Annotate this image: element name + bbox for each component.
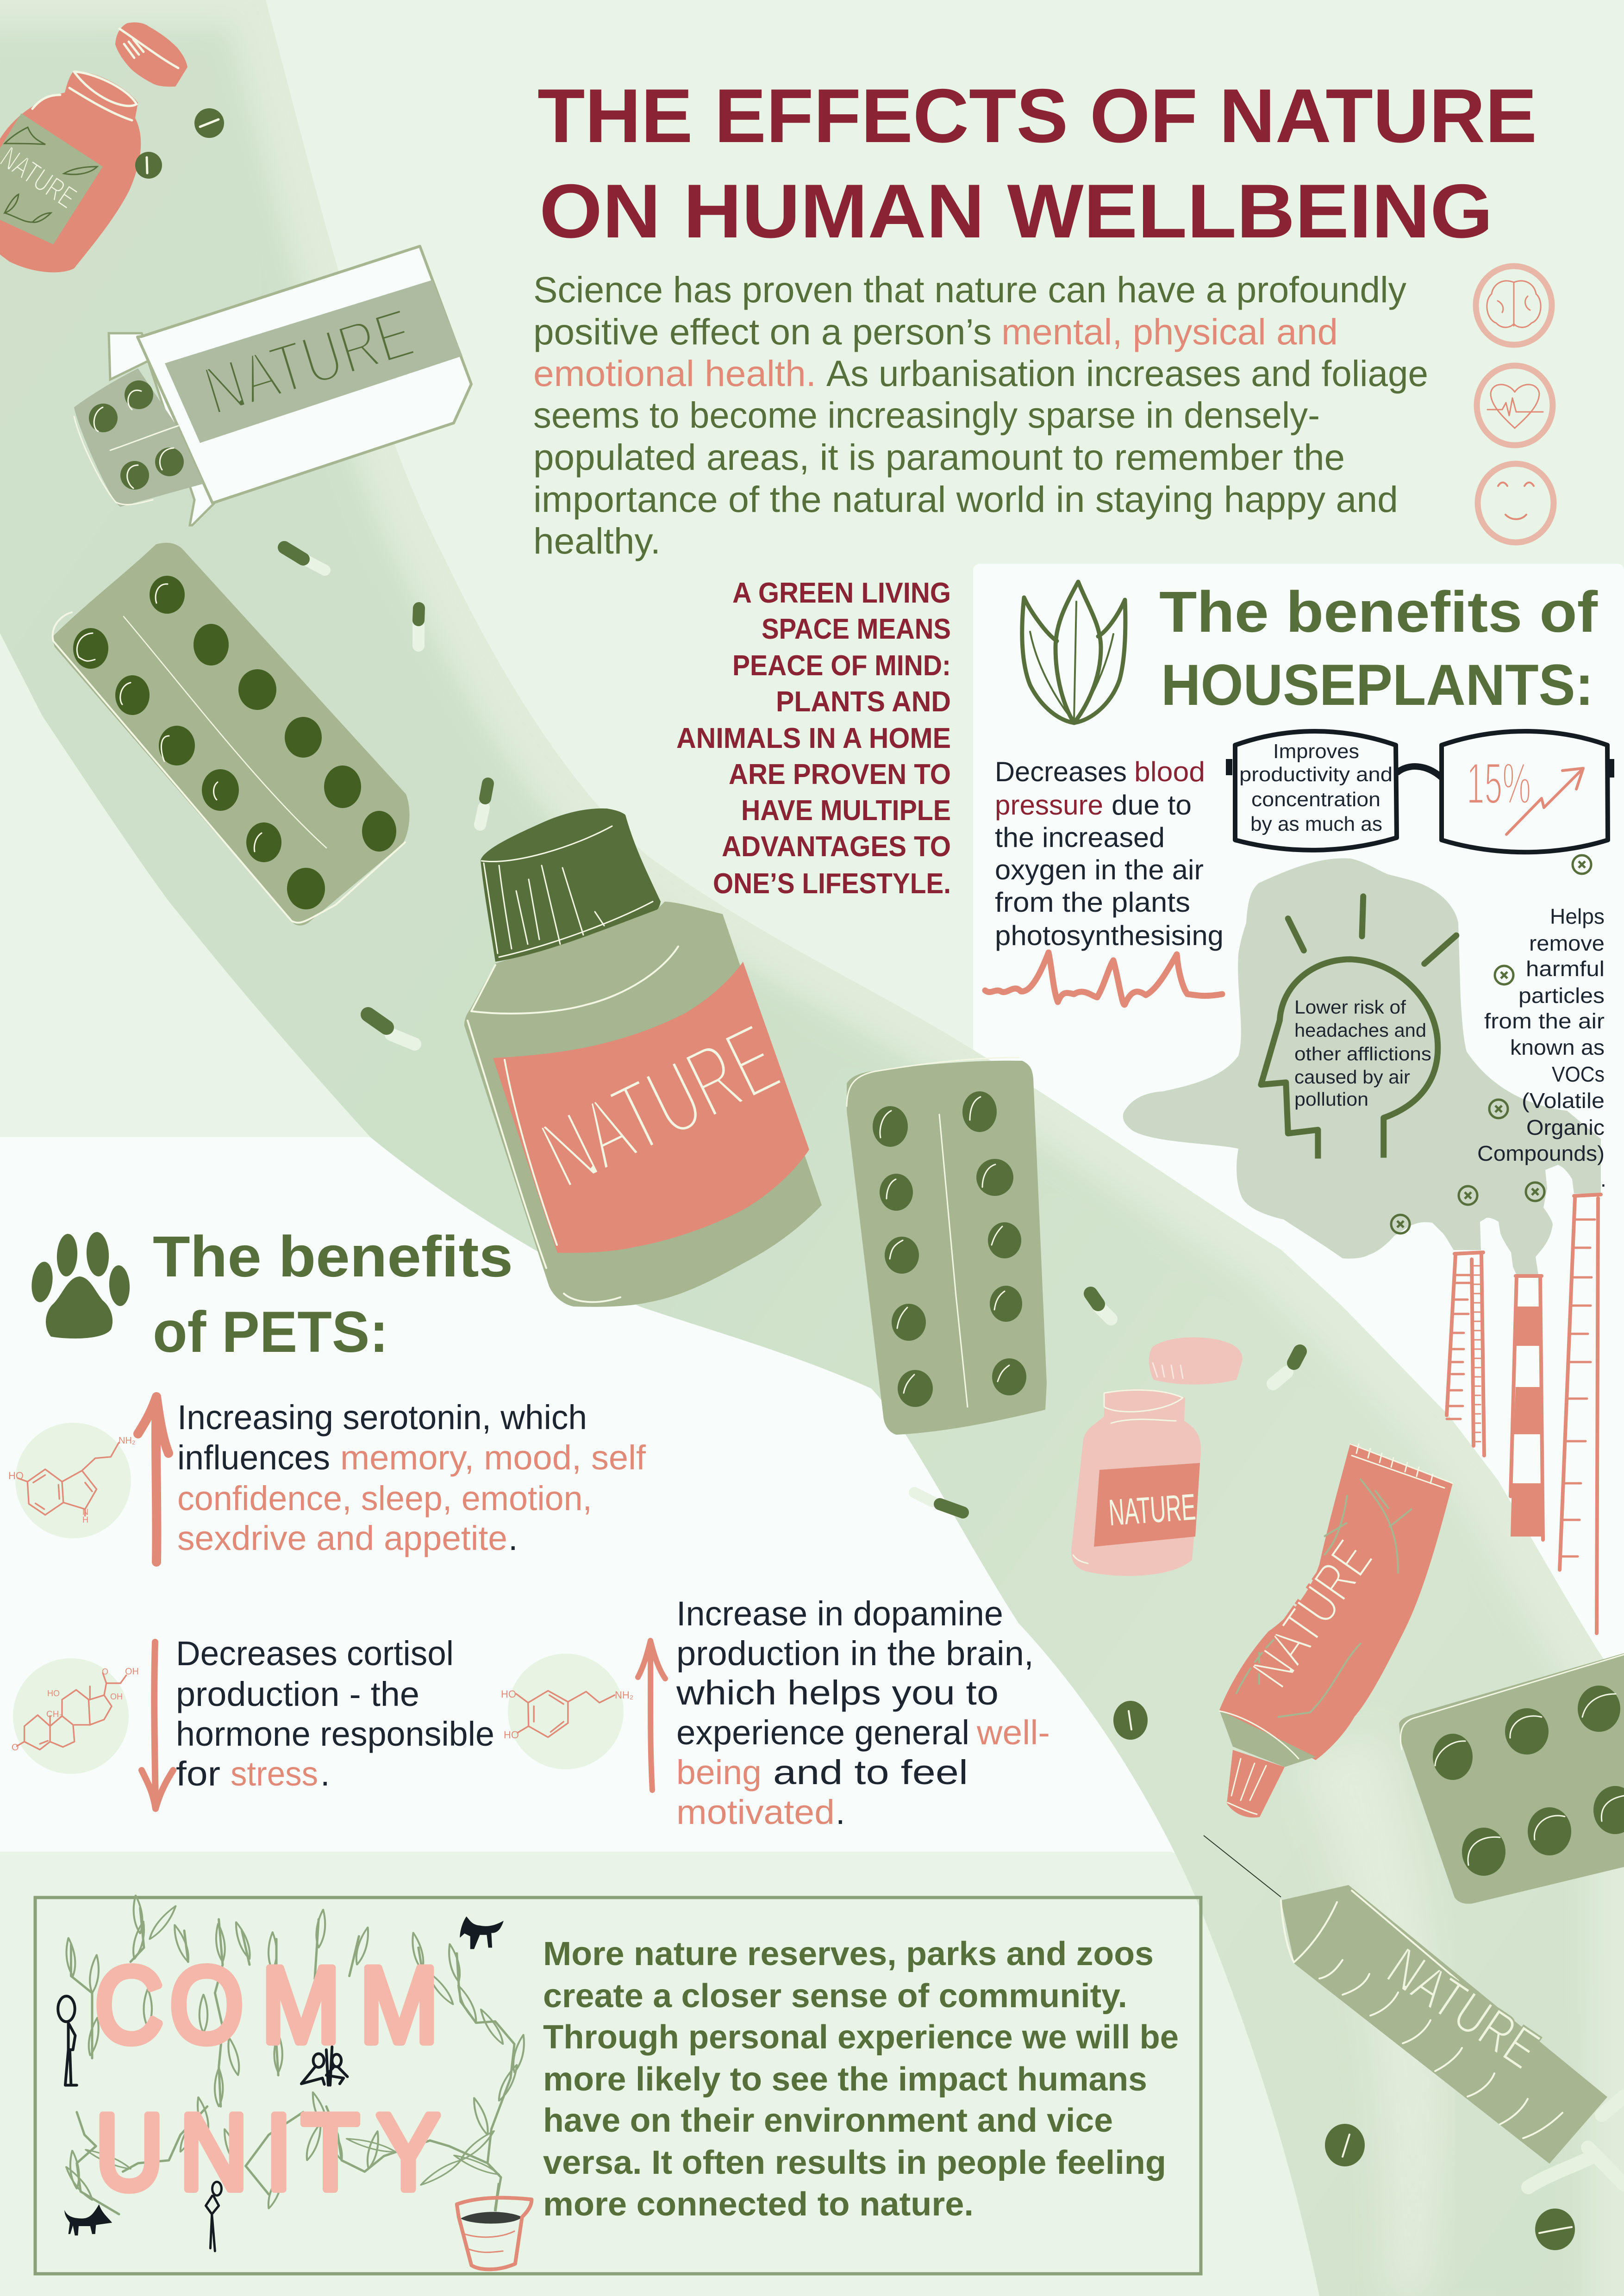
text block: dopamine: production in the brain, <box>676 1634 1034 1673</box>
text block: green living space: A GREEN LIVING <box>732 577 951 609</box>
text: UNITY: UNITY <box>95 2092 440 2212</box>
text block: cortisol: . <box>320 1755 330 1793</box>
icon: dopamine molecule: HO <box>504 1729 519 1741</box>
text: COMM: COMM <box>95 1945 438 2065</box>
text block: lower risk of headaches: Lower risk of <box>1294 996 1406 1018</box>
text block: serotonin <box>177 1398 646 1557</box>
statistic: 15%: 15% <box>1467 752 1531 816</box>
text block: community: Through personal experience we will be <box>543 2019 1179 2056</box>
icon: capsules <box>284 548 1300 1512</box>
chimney: left, ladder <box>1447 1252 1484 1456</box>
text block: introduction: healthy. <box>533 520 661 561</box>
stick figures: seated couple <box>301 2047 347 2085</box>
text block: green living space: PLANTS AND <box>776 686 951 718</box>
text block: green living space: SPACE MEANS <box>762 613 951 645</box>
text block: helps remove VOCs: from the air <box>1484 1009 1605 1033</box>
text block: blood pressure: oxygen in the air <box>995 854 1204 885</box>
text block: introduction: mental, physical and <box>1001 311 1338 352</box>
text block: community: more likely to see the impact humans <box>543 2061 1147 2098</box>
icon: brain in circle <box>1476 266 1552 345</box>
text block: lower risk of headaches: other afflictions <box>1294 1043 1431 1064</box>
chimney: right, ladder <box>1560 1195 1601 1633</box>
icon: syringe <box>1204 1836 1624 2187</box>
dog: bottom left <box>64 2204 112 2235</box>
text block: green living space: ARE PROVEN TO <box>729 759 951 790</box>
icon: upward arrow <box>1506 768 1583 834</box>
icon: red pill bottle, top left <box>0 22 187 272</box>
glasses text <box>1239 740 1393 835</box>
icon: heart in circle <box>1477 366 1553 445</box>
text block: introduction: populated areas, it is paramount to remember the <box>533 436 1345 478</box>
text block: serotonin: sexdrive and appetite <box>177 1519 507 1557</box>
text block: serotonin: Increasing serotonin, which <box>177 1398 587 1437</box>
arrow: cortisol down <box>142 1642 173 1809</box>
text block: blood pressure: blood <box>1134 756 1205 787</box>
text block: helps remove VOCs: Compounds) <box>1477 1141 1605 1165</box>
text block: helps remove VOCs: harmful <box>1526 957 1605 981</box>
panel: community frame <box>35 1898 1201 2274</box>
stick figure: standing bottom <box>206 2182 221 2251</box>
icon: cortisol molecule <box>12 1658 139 1774</box>
text block: dopamine <box>676 1594 1050 1831</box>
title: ON HUMAN WELLBEING <box>539 168 1493 254</box>
title: THE EFFECTS OF NATURE <box>537 73 1537 158</box>
icon: cortisol molecule: OH <box>110 1692 123 1701</box>
heading: benefits of houseplants: The benefits of <box>1159 580 1598 644</box>
heading: benefits of houseplants: HOUSEPLANTS: <box>1161 653 1593 717</box>
blister sliding out of box <box>74 368 204 507</box>
heading: benefits of pets: of PETS: <box>153 1300 388 1364</box>
chimneys <box>1447 1195 1601 1633</box>
icon: nature pill box <box>74 246 471 525</box>
text block: introduction <box>533 269 1428 561</box>
text block: helps remove VOCs: known as <box>1510 1035 1605 1059</box>
text block: green living space: PEACE OF MIND: <box>732 650 951 682</box>
text block: serotonin: memory, mood, self <box>340 1438 646 1477</box>
icon: large green blister pack <box>52 543 410 926</box>
label: NATURE on syringe: NATURE <box>1376 1935 1550 2081</box>
text block: green living space <box>676 577 951 900</box>
text block: blood pressure: Decreases <box>995 756 1127 787</box>
icon: small round pills, top <box>135 108 224 179</box>
icon: smile in circle <box>1478 464 1554 542</box>
text block: serotonin: confidence, sleep, emotion, <box>177 1479 592 1518</box>
text block: serotonin: . <box>508 1519 518 1557</box>
glasses text: Improves <box>1273 740 1359 763</box>
text block: community: More nature reserves, parks and zoos <box>543 1935 1154 1972</box>
heading: benefits of houseplants <box>1159 580 1598 717</box>
text block: introduction: importance of the natural world in staying happy and <box>533 479 1398 520</box>
icon: leaf <box>1022 582 1125 723</box>
panel: houseplants background <box>973 564 1624 1721</box>
icon: dopamine molecule: NH₂ <box>615 1689 633 1701</box>
icon: serotonin molecule: NH₂ <box>119 1436 136 1446</box>
icon: VOC particles <box>1391 855 1591 1233</box>
text block: blood pressure: from the plants <box>995 887 1190 918</box>
icon: paw print <box>29 1232 131 1338</box>
text block: green living space: ADVANTAGES TO <box>722 831 951 863</box>
text block: cortisol: Decreases cortisol <box>176 1634 454 1673</box>
arrow: dopamine up <box>638 1641 665 1790</box>
label: NATURE on large bottle: NATURE <box>525 1002 795 1209</box>
text block: green living space: HAVE MULTIPLE <box>741 795 951 827</box>
icon: serotonin molecule: HO <box>8 1470 24 1481</box>
dog: top right <box>460 1916 504 1949</box>
glasses text: productivity and <box>1239 763 1393 786</box>
text block: dopamine: . <box>836 1793 845 1831</box>
text block: dopamine: well- <box>976 1713 1050 1752</box>
icon: pink jar <box>1071 1338 1243 1576</box>
text block: lower risk of headaches <box>1294 996 1431 1110</box>
text block: dopamine: being <box>676 1753 762 1792</box>
text block: dopamine: Increase in dopamine <box>676 1594 1003 1633</box>
text block: helps remove VOCs: . <box>1600 1167 1606 1191</box>
text block: community: create a closer sense of community. <box>543 1978 1127 2015</box>
icon: cortisol molecule: OH <box>125 1667 139 1677</box>
arrow: serotonin up <box>138 1397 169 1562</box>
text block: cortisol <box>176 1634 494 1793</box>
label: NATURE on box: NATURE <box>195 293 422 430</box>
icon: serotonin molecule: N <box>82 1507 88 1517</box>
text block: community <box>543 1935 1179 2223</box>
label: NATURE on tube: NATURE <box>1240 1529 1385 1699</box>
icon: cortisol molecule: O <box>12 1742 19 1753</box>
icon: blister pack, right <box>1399 1653 1624 1904</box>
text block: cortisol: for <box>176 1755 220 1793</box>
text block: blood pressure <box>995 756 1224 951</box>
text block: introduction: As urbanisation increases and foliage <box>826 353 1428 394</box>
icon: cortisol molecule: CH₃ <box>46 1710 62 1719</box>
text block: introduction: Science has proven that nature can have a profoundly <box>533 269 1406 310</box>
icon: round pills, lower <box>1113 1701 1575 2250</box>
heading: benefits of pets: The benefits <box>153 1225 513 1289</box>
text block: helps remove VOCs <box>1477 904 1606 1191</box>
text block: dopamine: and to feel <box>773 1753 968 1792</box>
glasses text: concentration <box>1251 788 1380 811</box>
smoke cloud <box>1123 858 1601 1275</box>
text block: green living space: ONE’S LIFESTYLE. <box>713 868 951 900</box>
text block: dopamine: motivated <box>676 1793 835 1831</box>
text block: community: more connected to nature. <box>543 2186 974 2223</box>
text block: helps remove VOCs: (Volatile <box>1522 1089 1605 1113</box>
panel: pets background <box>0 1137 1250 1853</box>
text block: cortisol: stress <box>231 1755 318 1793</box>
text block: lower risk of headaches: caused by air <box>1294 1066 1410 1088</box>
text block: helps remove VOCs: remove <box>1529 931 1605 955</box>
icon: toothpaste tube <box>1219 1443 1453 1817</box>
text block: blood pressure: due to <box>1112 790 1192 821</box>
text block: blood pressure: the increased <box>995 822 1165 853</box>
icon: blister pack, centre <box>847 1058 1047 1435</box>
text block: introduction: seems to become increasingly sparse in densely- <box>533 394 1320 436</box>
text block: helps remove VOCs: Organic <box>1526 1115 1605 1139</box>
icon: head outline with rays <box>1261 896 1456 1158</box>
panel: community background <box>0 1852 1319 2296</box>
text block: helps remove VOCs: VOCs <box>1552 1062 1605 1086</box>
text block: lower risk of headaches: pollution <box>1294 1089 1368 1110</box>
icon: serotonin molecule: H <box>82 1515 88 1524</box>
text block: serotonin: influences <box>177 1438 330 1477</box>
text block: introduction: positive effect on a person’s <box>533 311 992 352</box>
icon: cortisol molecule: O <box>102 1667 108 1676</box>
text block: lower risk of headaches: headaches and <box>1294 1020 1426 1041</box>
text block: introduction: emotional health. <box>533 353 816 394</box>
icon: serotonin molecule <box>8 1423 136 1538</box>
text block: dopamine: experience general <box>676 1713 969 1752</box>
text block: blood pressure: photosynthesising <box>995 920 1224 951</box>
illustration: plant pot <box>457 2183 531 2269</box>
stick figure: standing left <box>58 1996 77 2085</box>
icon: cortisol molecule: HO <box>47 1689 60 1698</box>
text block: helps remove VOCs: Helps <box>1550 904 1605 928</box>
glasses text: by as much as <box>1250 813 1382 835</box>
label: NATURE on jar: NATURE <box>1107 1486 1197 1533</box>
text block: cortisol: hormone responsible <box>176 1715 494 1753</box>
icon: dopamine molecule: HO <box>501 1688 516 1700</box>
heading: benefits of pets <box>153 1225 513 1364</box>
icon: dopamine molecule <box>501 1654 633 1769</box>
text block: blood pressure: pressure <box>995 790 1103 821</box>
text block: community: versa. It often results in people feeling <box>543 2144 1166 2181</box>
icon: pulse line <box>985 952 1222 1005</box>
title <box>537 73 1537 254</box>
text block: helps remove VOCs: particles <box>1518 983 1605 1008</box>
icon: glasses <box>1229 731 1611 852</box>
illustration: vines <box>62 1895 527 2214</box>
chimney: middle, striped <box>1511 1275 1543 1540</box>
icon: large bottle <box>464 809 822 1307</box>
text block: cortisol: production - the <box>176 1675 419 1713</box>
illustration: stick figures and dogs <box>58 1916 504 2251</box>
text block: community: have on their environment and vice <box>543 2102 1113 2139</box>
text block: green living space: ANIMALS IN A HOME <box>676 722 951 754</box>
text block: dopamine: which helps you to <box>676 1674 999 1712</box>
